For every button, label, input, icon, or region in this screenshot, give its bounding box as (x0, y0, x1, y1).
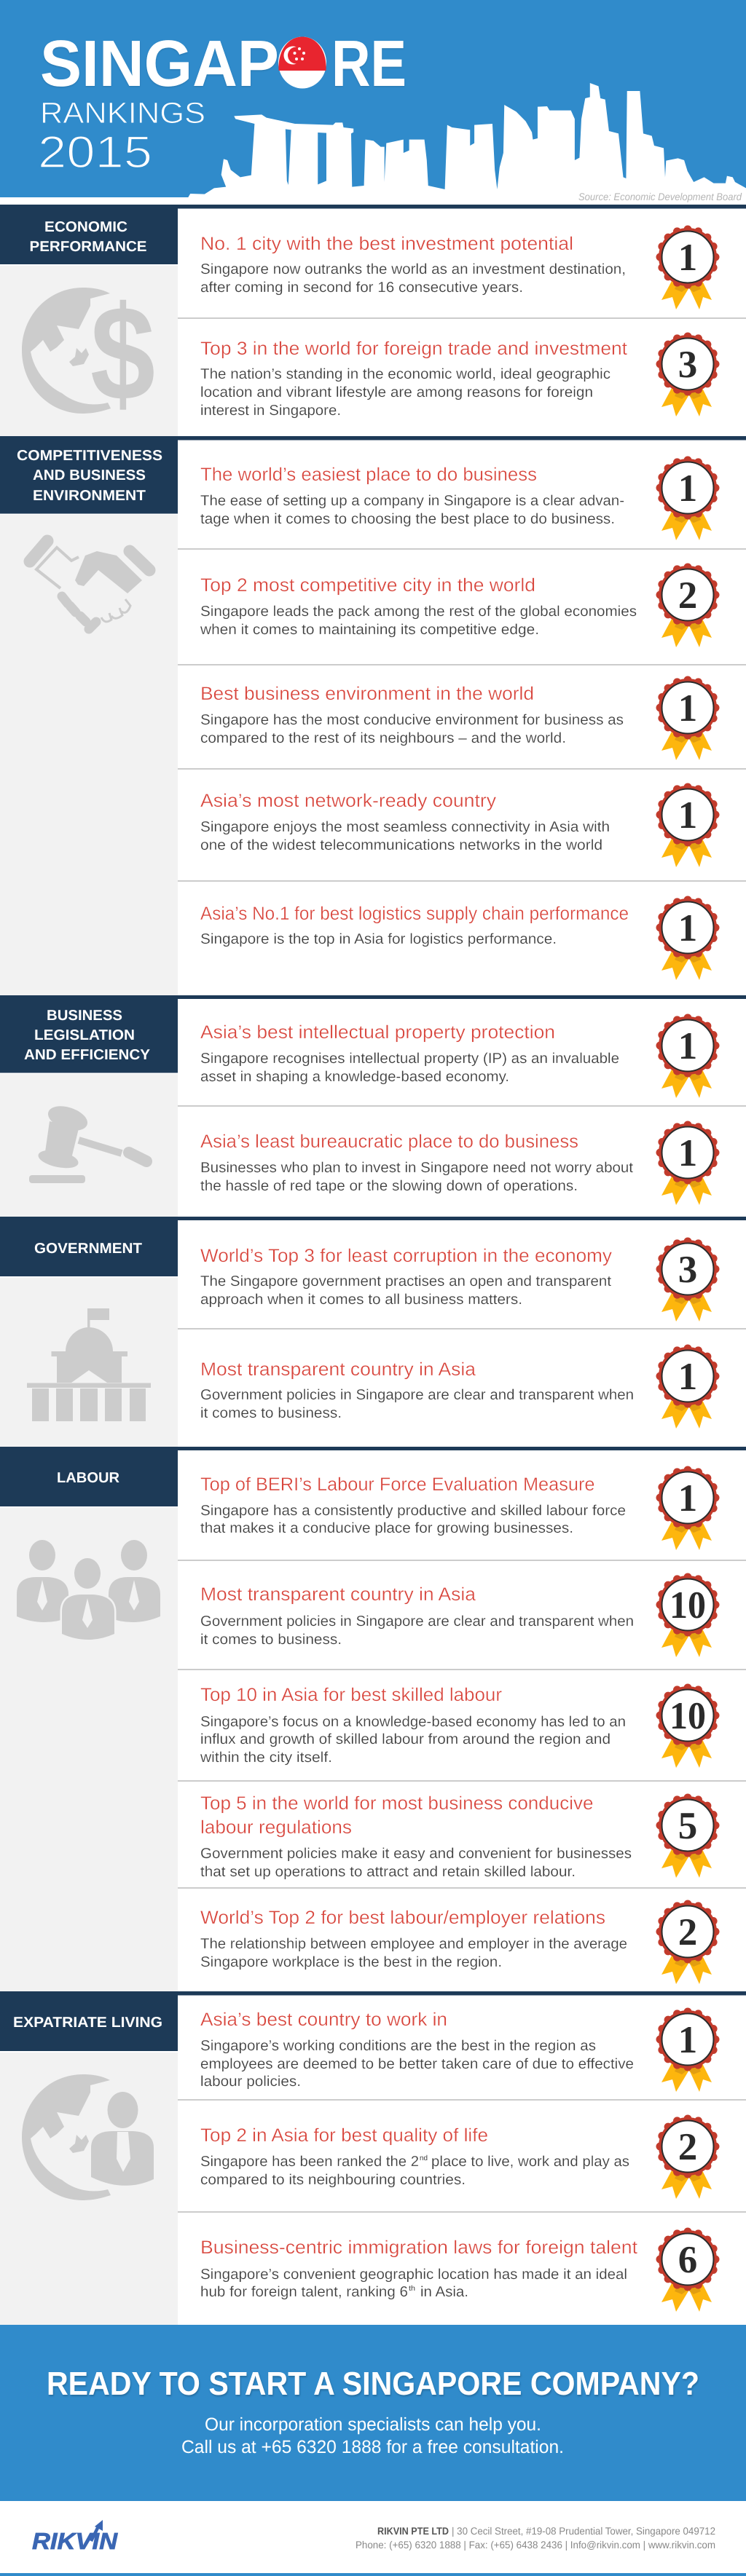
ranking item: logistics supply chain: Singapore is the top in Asia for logistics performance. (200, 931, 557, 947)
medal: rank 1 (656, 1344, 720, 1429)
medal: rank 1: 1 (678, 1025, 697, 1067)
ranking item: best skilled labour: within the city itself. (200, 1750, 332, 1766)
ranking item: best investment potential: No. 1 city with the best investment potential (200, 234, 573, 254)
ranking item: most transparent country: Most transparent country in Asia (200, 1359, 476, 1380)
ranking item: best skilled labour: influx and growth of skilled labour from around the region and (200, 1731, 610, 1747)
section heading: expatriate living (0, 1991, 178, 2051)
ranking item: immigration laws: in Asia. (420, 2284, 468, 2300)
ranking item: foreign trade and investment: Top 3 in the world for foreign trade and investment (200, 339, 627, 359)
medal: rank 1: 1 (678, 2019, 697, 2061)
medal: rank 1 (656, 676, 720, 760)
medal: rank 1 (656, 896, 720, 980)
ranking item: logistics supply chain: Asia’s No.1 for best logistics supply chain performance (200, 904, 629, 924)
ranking item: easiest place to do business: The world’s easiest place to do business (200, 465, 537, 485)
icon: globe and dollar sign: $ (90, 279, 155, 429)
medal: rank 10: 10 (670, 1584, 706, 1627)
ranking item: least corruption: approach when it comes to all business matters. (200, 1292, 522, 1308)
title: SINGAPORE: RE (331, 28, 407, 100)
ranking item: least corruption (200, 1238, 720, 1321)
medal: rank 1: 1 (678, 1477, 697, 1520)
ranking item: immigration laws (200, 2228, 720, 2312)
title: SINGAPORE (40, 28, 407, 100)
medal: rank 1 (656, 1466, 720, 1550)
medal: rank 2 (656, 1900, 720, 1984)
ranking item: easiest place to do business: The ease of setting up a company in Singapore is a clear advan- (200, 493, 624, 509)
medal: rank 1: 1 (678, 1356, 697, 1398)
medal: rank 1: 1 (678, 687, 697, 730)
company contact details: Phone: (+65) 6320 1888 | Fax: (+65) 6438 2436 | Info@rikvin.com | www.rikvin.com (356, 2539, 715, 2551)
ranking item: least bureaucratic: the hassle of red tape or the slowing down of operations. (200, 1178, 578, 1194)
panel: government (0, 1217, 746, 1447)
medal: rank 3 (656, 332, 720, 416)
medal: rank 3: 3 (678, 1249, 697, 1291)
ranking item: network-ready country: Asia’s most network-ready country (200, 791, 496, 811)
ranking item: least corruption: The Singapore government practises an open and transparent (200, 1273, 611, 1289)
subtitle: RANKINGS: RANKINGS (40, 96, 205, 130)
ranking item: most transparent country: Most transparent country in Asia (200, 1584, 476, 1605)
medal: rank 1: 1 (678, 1132, 697, 1174)
ranking item: logistics supply chain (200, 896, 720, 980)
ranking item: best skilled labour (200, 1683, 720, 1768)
footer (0, 2520, 746, 2576)
ranking item: foreign trade and investment: interest in Singapore. (200, 403, 341, 419)
ranking item: foreign trade and investment (200, 332, 720, 419)
ranking item: best skilled labour: Top 10 in Asia for best skilled labour (200, 1685, 503, 1705)
icon: gavel (29, 1102, 146, 1183)
ranking item: labour force evaluation: that makes it a conducive place for growing businesses. (200, 1520, 573, 1536)
section heading: economic performance: PERFORMANCE (29, 239, 147, 255)
section heading: business legislation: BUSINESS (47, 1008, 122, 1024)
ranking item: intellectual property: Asia’s best intellectual property protection (200, 1022, 555, 1043)
ranking item: quality of life: compared to its neighbouring countries. (200, 2172, 466, 2188)
medal: rank 5 (656, 1794, 720, 1878)
medal: rank 3: 3 (678, 344, 697, 386)
section heading: competitiveness: COMPETITIVENESS (17, 448, 162, 464)
section heading: competitiveness (0, 436, 178, 514)
section heading: competitiveness: ENVIRONMENT (33, 488, 146, 504)
ranking item: labour force evaluation (200, 1466, 720, 1550)
panel: business legislation and efficiency (0, 995, 746, 1217)
text: incorporation specialists: Our incorporation specialists can help you. (205, 2414, 541, 2435)
ranking item: best business environment (200, 676, 720, 760)
ranking item: labour force evaluation: Top of BERI’s Labour Force Evaluation Measure (200, 1474, 594, 1495)
medal: rank 3 (656, 1238, 720, 1321)
ranking item: labour force evaluation: Singapore has a consistently productive and skilled labour force (200, 1503, 626, 1519)
ranking item: immigration laws: th (409, 2285, 415, 2293)
ranking item: intellectual property (200, 1014, 720, 1098)
icon: globe and dollar sign (22, 279, 155, 429)
medal: rank 1: 1 (678, 467, 697, 510)
section heading: business legislation: AND EFFICIENCY (24, 1047, 151, 1063)
ranking item: quality of life: Top 2 in Asia for best quality of life (200, 2125, 488, 2146)
ranking item: network-ready country: Singapore enjoys the most seamless connectivity in Asia with (200, 819, 610, 835)
medal: rank 1 (656, 783, 720, 867)
section heading: business legislation: LEGISLATION (34, 1027, 135, 1043)
heading: ready to start: READY TO START A SINGAPORE COMPANY? (47, 2365, 699, 2402)
icon: globe and business person (22, 2074, 154, 2200)
ranking item: labour employer relations: World’s Top 2 for best labour/employer relations (200, 1908, 605, 1928)
panel: competitiveness and business environment (0, 436, 746, 995)
ranking item: best business environment: compared to the rest of its neighbours – and the world. (200, 730, 566, 746)
medal: rank 1: 1 (678, 794, 697, 837)
section heading: labour (0, 1447, 178, 1506)
medal: rank 1: 1 (678, 237, 697, 279)
icon: government building (27, 1308, 151, 1421)
panel: economic performance (0, 205, 746, 436)
logo: Rikvin: RIKVIN (32, 2528, 118, 2554)
ranking item: best investment potential (200, 226, 720, 309)
ranking item: foreign trade and investment: The nation’s standing in the economic world, ideal geographic (200, 366, 610, 382)
icon: handshake (30, 541, 149, 629)
section heading: competitiveness: AND BUSINESS (33, 467, 146, 483)
call to action banner (0, 2325, 746, 2501)
ranking item: best investment potential: after coming in second for 16 consecutive years. (200, 280, 523, 296)
medal: rank 2: 2 (678, 2126, 697, 2168)
ranking item: labour regulations: labour regulations (200, 1817, 352, 1838)
header banner (0, 0, 746, 205)
ranking item: network-ready country: one of the widest telecommunications networks in the world (200, 837, 602, 853)
ranking item: immigration laws: hub for foreign talent, ranking 6 (200, 2284, 408, 2300)
medal: rank 6 (656, 2228, 720, 2312)
medal: rank 2: 2 (678, 574, 697, 617)
ranking item: most transparent country: it comes to business. (200, 1405, 342, 1421)
ranking item: labour employer relations: The relationship between employee and employer in the average (200, 1936, 627, 1952)
panel: labour (0, 1447, 746, 1991)
ranking item: intellectual property: asset in shaping a knowledge-based economy. (200, 1069, 509, 1085)
medal: rank 10 (656, 1573, 720, 1657)
ranking item: labour regulations: that set up operations to attract and retain skilled labour. (200, 1864, 576, 1880)
ranking item: most transparent country: Government policies in Singapore are clear and transparent when (200, 1613, 634, 1629)
icon: Singapore flag in the letter O (278, 36, 326, 89)
ranking item: quality of life: Singapore has been ranked the 2 (200, 2154, 419, 2170)
medal: rank 10: 10 (670, 1695, 706, 1737)
ranking item: most competitive city: Singapore leads the pack among the rest of the global economies (200, 604, 637, 620)
medal: rank 1 (656, 226, 720, 309)
ranking item: network-ready country (200, 783, 720, 867)
ranking item: most transparent country: Government policies in Singapore are clear and transparent when (200, 1387, 634, 1403)
ranking item: labour regulations: Government policies make it easy and convenient for businesses (200, 1846, 632, 1862)
ranking item: best country to work in: labour policies. (200, 2074, 301, 2090)
ranking item: best country to work in: Asia’s best country to work in (200, 2010, 447, 2030)
ranking item: most transparent country (200, 1573, 720, 1657)
ranking item: labour regulations (200, 1793, 720, 1880)
section heading: economic performance (0, 205, 178, 264)
ranking item: least bureaucratic (200, 1121, 720, 1205)
ranking item: labour regulations: Top 5 in the world for most business conducive (200, 1793, 593, 1814)
medal: rank 6: 6 (678, 2239, 697, 2281)
medal: rank 1: 1 (678, 907, 697, 949)
panel: expatriate living (0, 1991, 746, 2325)
ranking item: most transparent country: it comes to business. (200, 1632, 342, 1648)
medal: rank 1 (656, 1121, 720, 1205)
ranking item: foreign trade and investment: location and vibrant lifestyle are among reasons for foreign (200, 384, 593, 400)
ranking item: quality of life: place to live, work and play as (431, 2154, 629, 2170)
medal: rank 2 (656, 564, 720, 647)
title: SINGAPORE: SINGAP (40, 28, 279, 100)
section heading: government: GOVERNMENT (34, 1241, 142, 1257)
ranking item: least corruption: World’s Top 3 for least corruption in the economy (200, 1246, 612, 1266)
ranking item: best business environment: Singapore has the most conducive environment for business as (200, 712, 624, 728)
text: phone consultation: Call us at +65 6320 1888 for a free consultation. (181, 2437, 564, 2457)
ranking item: labour employer relations (200, 1900, 720, 1984)
ranking item: quality of life (200, 2114, 720, 2199)
medal: rank 2 (656, 2114, 720, 2199)
ranking item: best investment potential: Singapore now outranks the world as an investment destination, (200, 261, 626, 277)
section heading: economic performance: ECONOMIC (44, 219, 127, 235)
ranking item: most competitive city (200, 564, 719, 647)
ranking item: immigration laws: Business-centric immigration laws for foreign talent (200, 2237, 637, 2258)
ranking item: most transparent country (200, 1344, 720, 1429)
ranking item: easiest place to do business (200, 456, 720, 540)
ranking item: best country to work in: employees are deemed to be better taken care of due to effective (200, 2056, 634, 2072)
ranking item: least bureaucratic: Asia’s least bureaucratic place to do business (200, 1131, 578, 1152)
ranking item: most competitive city: Top 2 most competitive city in the world (200, 575, 535, 596)
ranking item: immigration laws: Singapore’s convenient geographic location has made it an ideal (200, 2267, 627, 2283)
company address: | 30 Cecil Street, #19-08 Prudential Tower, Singapore 049712 (452, 2525, 715, 2537)
ranking item: easiest place to do business: tage when it comes to choosing the best place to do business. (200, 511, 615, 527)
ranking item: best business environment: Best business environment in the world (200, 684, 534, 704)
medal: rank 1 (656, 1014, 720, 1098)
ranking item: least bureaucratic: Businesses who plan to invest in Singapore need not worry about (200, 1160, 633, 1176)
ranking item: best skilled labour: Singapore’s focus on a knowledge-based economy has led to an (200, 1714, 626, 1730)
section heading: business legislation (0, 995, 178, 1073)
illustration: Singapore skyline (188, 83, 746, 205)
medal: rank 1 (656, 2008, 720, 2092)
section heading: government (0, 1217, 178, 1276)
ranking item: labour employer relations: Singapore workplace is the best in the region. (200, 1954, 502, 1970)
ranking item: intellectual property: Singapore recognises intellectual property (IP) as an invaluable (200, 1051, 619, 1067)
title: SINGAPORE: O (280, 28, 324, 100)
ranking item: quality of life: nd (420, 2154, 428, 2162)
ranking item: most competitive city: when it comes to maintaining its competitive edge. (200, 622, 539, 638)
section heading: labour: LABOUR (57, 1470, 120, 1486)
company address: RIKVIN PTE LTD (377, 2525, 449, 2537)
section heading: expatriate living: EXPATRIATE LIVING (13, 2015, 162, 2031)
medal: rank 2: 2 (678, 1911, 697, 1953)
medal: rank 10 (656, 1683, 720, 1768)
ranking item: best country to work in: Singapore’s working conditions are the best in the region as (200, 2038, 596, 2054)
icon: three business people (17, 1540, 160, 1640)
ranking item: best country to work in (200, 2008, 720, 2092)
medal: rank 5: 5 (678, 1805, 697, 1847)
medal: rank 1 (656, 456, 720, 540)
subtitle: year 2015: 2015 (38, 127, 152, 178)
